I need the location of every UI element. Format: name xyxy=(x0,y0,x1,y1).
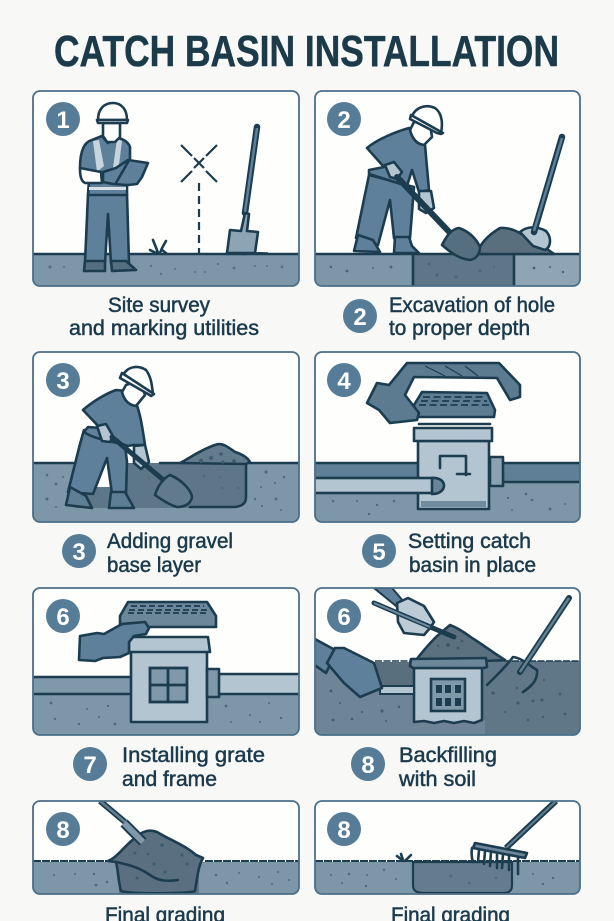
caption 8: Backfilling xyxy=(399,744,497,767)
badge 6: 6 xyxy=(56,604,70,631)
icon: soil mound xyxy=(477,228,554,254)
panel: step 3 gravel base xyxy=(33,352,299,522)
icon: gravel pile xyxy=(180,444,250,464)
caption 3: base layer xyxy=(107,554,201,577)
back pipe xyxy=(315,463,580,483)
badge 2: 2 xyxy=(337,107,351,134)
left arm xyxy=(316,638,334,674)
panel border 6 xyxy=(315,588,580,735)
badge 3 xyxy=(46,363,80,397)
badge 1: 1 xyxy=(56,107,70,134)
panel: final grading left xyxy=(33,801,299,894)
panel border 4 xyxy=(315,352,580,522)
caption 5: basin in place xyxy=(409,554,536,577)
ground with filled hole xyxy=(315,861,580,894)
icon: rake xyxy=(472,801,556,874)
icon: standing shovel xyxy=(520,598,569,672)
panel border 7 xyxy=(33,801,299,894)
panel: final grading right xyxy=(315,801,580,894)
ground xyxy=(33,861,299,894)
caption 8: with soil xyxy=(398,768,476,791)
badge 2 xyxy=(327,102,361,136)
icon: grate xyxy=(120,602,216,627)
caption 1 xyxy=(69,294,259,340)
caption 7 xyxy=(73,744,265,791)
badge 8b: 8 xyxy=(337,817,351,844)
panel border 2 xyxy=(315,91,580,286)
caption 8 xyxy=(351,744,497,791)
icon: soil mound xyxy=(413,625,537,692)
caption 1: and marking utilities xyxy=(69,317,259,340)
ground with hole xyxy=(315,254,580,286)
panel: step 2 excavation xyxy=(315,91,580,286)
caption 3 xyxy=(62,530,233,577)
caption 5: Setting catch xyxy=(408,530,531,553)
caption 2: Excavation of hole xyxy=(389,294,555,317)
panel: step 6 grate and frame xyxy=(33,588,299,735)
caption 3: 3 xyxy=(72,539,86,566)
panel: step 4 setting basin xyxy=(313,352,580,522)
panel: step 8 backfilling xyxy=(313,588,580,735)
badge 4 xyxy=(327,363,361,397)
icon: digging shovel xyxy=(397,177,480,260)
icon: shovel xyxy=(224,127,268,254)
front pipe xyxy=(313,478,444,494)
icon: hands holding grate xyxy=(367,363,520,423)
badge 4: 4 xyxy=(337,368,351,395)
ground with trench xyxy=(33,462,299,522)
icon: basin box xyxy=(414,424,503,509)
caption 2 xyxy=(343,294,555,340)
badge 3: 3 xyxy=(56,368,70,395)
icon: gravel shovel xyxy=(112,437,192,507)
icon: grass tuft xyxy=(150,240,166,253)
icon: utility marking xyxy=(181,145,217,254)
icon: worker adding gravel xyxy=(66,367,154,508)
caption 7: 7 xyxy=(83,752,97,779)
caption 8: 8 xyxy=(361,752,375,779)
icon: digging worker xyxy=(354,106,443,253)
panel border 8 xyxy=(315,801,580,894)
icon: shovel handle xyxy=(100,801,143,842)
caption 7: Installing grate xyxy=(122,744,265,767)
panel border 5 xyxy=(33,588,299,735)
caption 5: 5 xyxy=(372,539,386,566)
caption 2: 2 xyxy=(353,304,367,331)
ground xyxy=(33,254,299,286)
ground xyxy=(315,483,580,522)
caption 2: to proper depth xyxy=(389,317,530,340)
panel border 3 xyxy=(33,352,299,522)
badge 6 xyxy=(46,599,80,633)
icon: gloved hand xyxy=(79,622,149,661)
caption 3: Adding gravel xyxy=(107,530,233,553)
soil xyxy=(315,661,580,735)
badge 6b xyxy=(327,599,361,633)
badge 8: 8 xyxy=(56,817,70,844)
badge 6b: 6 xyxy=(337,604,351,631)
icon: upper hand and tool xyxy=(374,588,454,637)
caption 1: Site survey xyxy=(108,294,210,317)
badge 1 xyxy=(46,102,80,136)
icon: grate xyxy=(413,392,495,417)
ground and pipes xyxy=(33,674,299,735)
icon: worker with clipboard xyxy=(80,103,148,271)
badge 8 xyxy=(46,812,80,846)
panel: step 1 site survey xyxy=(33,91,299,286)
icon: basin box xyxy=(129,637,219,722)
badge 8b xyxy=(327,812,361,846)
icon: left glove and pipe xyxy=(327,648,414,697)
caption 5 xyxy=(362,530,536,577)
icon: basin box xyxy=(410,658,487,723)
icon: soil heap in hole xyxy=(108,831,203,893)
panel border 1 xyxy=(33,91,299,286)
icon: standing shovel xyxy=(520,137,562,250)
icon: grass tuft xyxy=(397,854,411,861)
caption 7: and frame xyxy=(122,768,217,791)
